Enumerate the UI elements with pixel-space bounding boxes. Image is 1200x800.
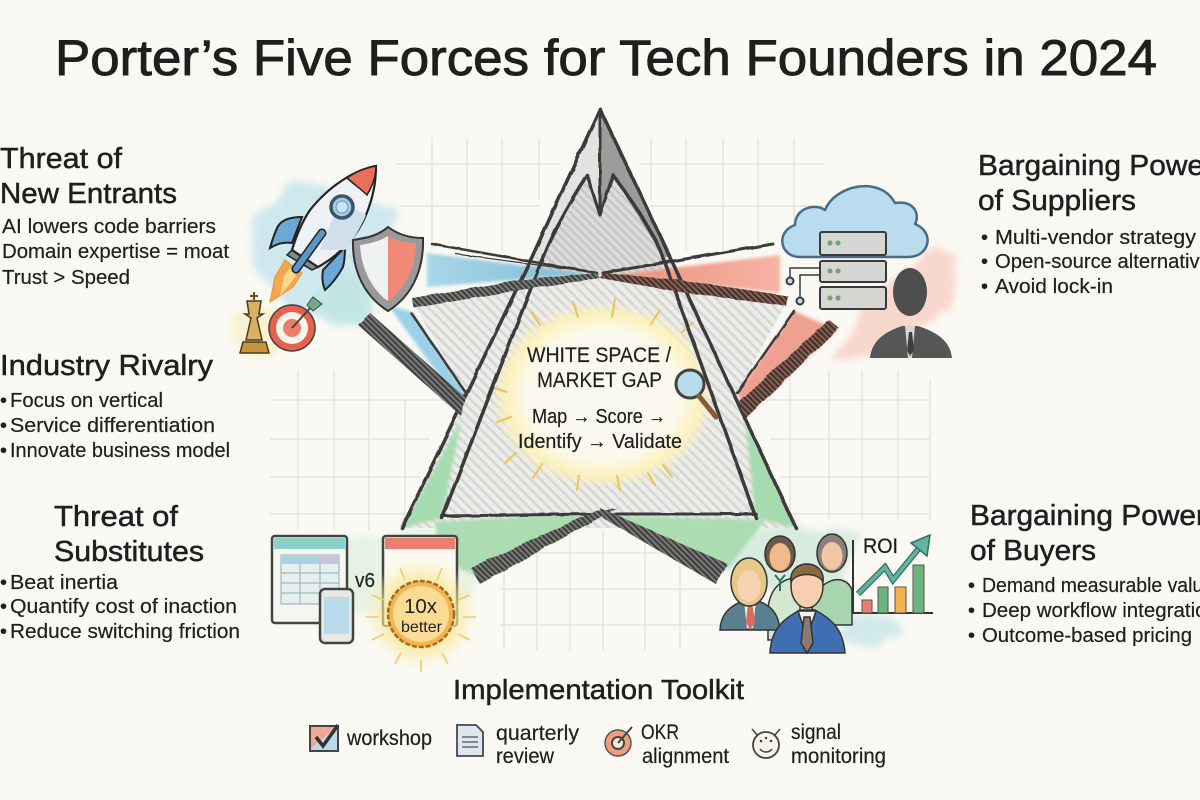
center text: white space: Map → Score → xyxy=(532,406,666,428)
panel: bargaining power of suppliers: Multi-vendor strategy xyxy=(995,227,1196,249)
toolkit item: OKR alignment: OKR xyxy=(641,721,679,744)
panel: threat of new entrants: Trust > Speed xyxy=(2,267,130,289)
center text: white space: Identify → Validate xyxy=(518,431,682,453)
icon: shield xyxy=(353,227,423,311)
panel: bargaining power of suppliers: • xyxy=(981,251,988,273)
toolkit item: workshop xyxy=(310,725,432,751)
panel: bargaining power of buyers: Bargaining Power xyxy=(970,500,1200,532)
panel: bargaining power of suppliers xyxy=(978,150,1200,298)
panel: bargaining power of buyers: • xyxy=(968,575,975,597)
icon: supplier silhouette xyxy=(870,268,952,358)
icon: ROI chart: ROI xyxy=(863,535,898,558)
center text: white space: MARKET GAP xyxy=(537,369,662,392)
panel: industry rivalry: Service differentiation xyxy=(10,415,215,437)
toolkit item: quarterly review: quarterly xyxy=(496,722,580,745)
icon: phone xyxy=(320,589,353,643)
panel: industry rivalry: • xyxy=(0,415,7,437)
icon: chess king xyxy=(240,292,269,353)
colored wedges xyxy=(388,253,837,575)
panel: threat of substitutes: • xyxy=(0,572,7,594)
panel: threat of new entrants xyxy=(0,143,229,289)
panel: threat of new entrants: Domain expertise = moat xyxy=(2,241,229,263)
panel: threat of substitutes: • xyxy=(0,621,7,643)
panel: threat of new entrants: New Entrants xyxy=(0,178,177,210)
panel: bargaining power of buyers: of Buyers xyxy=(970,535,1096,567)
panel: bargaining power of suppliers: Avoid lock-in xyxy=(995,276,1113,298)
panel: threat of substitutes xyxy=(0,501,240,643)
star diagram xyxy=(232,109,960,645)
panel: bargaining power of buyers: • xyxy=(968,600,975,622)
panel: industry rivalry: • xyxy=(0,440,7,462)
icon: 10x better badge xyxy=(365,558,477,672)
star outlines xyxy=(402,109,796,528)
panel: bargaining power of buyers: • xyxy=(968,625,975,647)
toolkit item: signal monitoring: monitoring xyxy=(791,745,886,768)
icon: 10x better badge: 10x xyxy=(404,596,437,618)
icon: buyers group xyxy=(720,534,852,653)
panel: industry rivalry: Innovate business model xyxy=(10,440,230,462)
panel: threat of substitutes: Substitutes xyxy=(54,536,204,568)
center text: white space: WHITE SPACE / xyxy=(527,344,671,367)
watercolor washes behind icons xyxy=(232,182,960,645)
panel: industry rivalry xyxy=(0,350,230,462)
panel: threat of substitutes: Threat of xyxy=(54,501,179,533)
title: Porter’s Five Forces for Tech Founders in 2024 xyxy=(55,30,1157,86)
icon: magnifying glass xyxy=(676,370,716,417)
panel: threat of substitutes: • xyxy=(0,596,7,618)
central white space glow xyxy=(491,301,715,489)
panel: bargaining power of suppliers: of Suppliers xyxy=(978,185,1136,217)
icon: new product window xyxy=(383,536,457,626)
panel: threat of new entrants: Threat of xyxy=(0,143,123,175)
toolkit item: signal monitoring xyxy=(752,721,886,768)
panel: bargaining power of buyers: Outcome-based pricing xyxy=(982,625,1192,647)
panel: industry rivalry: Industry Rivalry xyxy=(0,350,214,382)
center text: white space xyxy=(518,344,682,453)
panel: industry rivalry: • xyxy=(0,390,7,412)
icon: target xyxy=(269,297,322,351)
panel: threat of substitutes: Quantify cost of inaction xyxy=(10,596,237,618)
toolkit item: signal monitoring: signal xyxy=(791,721,841,744)
icon: 10x better badge: better xyxy=(401,619,443,636)
toolkit item: workshop: workshop xyxy=(346,727,432,750)
icon: spreadsheet window xyxy=(272,536,347,623)
icon: ROI chart xyxy=(853,535,933,613)
panel: threat of substitutes: Beat inertia xyxy=(10,572,119,594)
panel: threat of new entrants: AI lowers code barriers xyxy=(2,216,216,238)
panel: bargaining power of buyers xyxy=(968,500,1200,647)
toolkit item: OKR alignment: alignment xyxy=(642,745,729,768)
toolkit item: OKR alignment xyxy=(605,721,729,768)
toolkit item: quarterly review: review xyxy=(496,745,555,768)
panel: bargaining power of suppliers: • xyxy=(981,227,988,249)
label: v6: v6 xyxy=(355,570,375,592)
panel: industry rivalry: Focus on vertical xyxy=(10,390,163,412)
toolkit heading: Implementation Toolkit xyxy=(453,674,744,705)
panel: bargaining power of suppliers: • xyxy=(981,276,988,298)
icon: server stack xyxy=(786,232,886,309)
panel: threat of substitutes: Reduce switching friction xyxy=(10,621,240,643)
icon: cloud xyxy=(782,186,928,257)
star body hatch xyxy=(402,175,796,528)
toolkit item: quarterly review xyxy=(457,722,580,768)
icon: rocket xyxy=(270,166,376,302)
